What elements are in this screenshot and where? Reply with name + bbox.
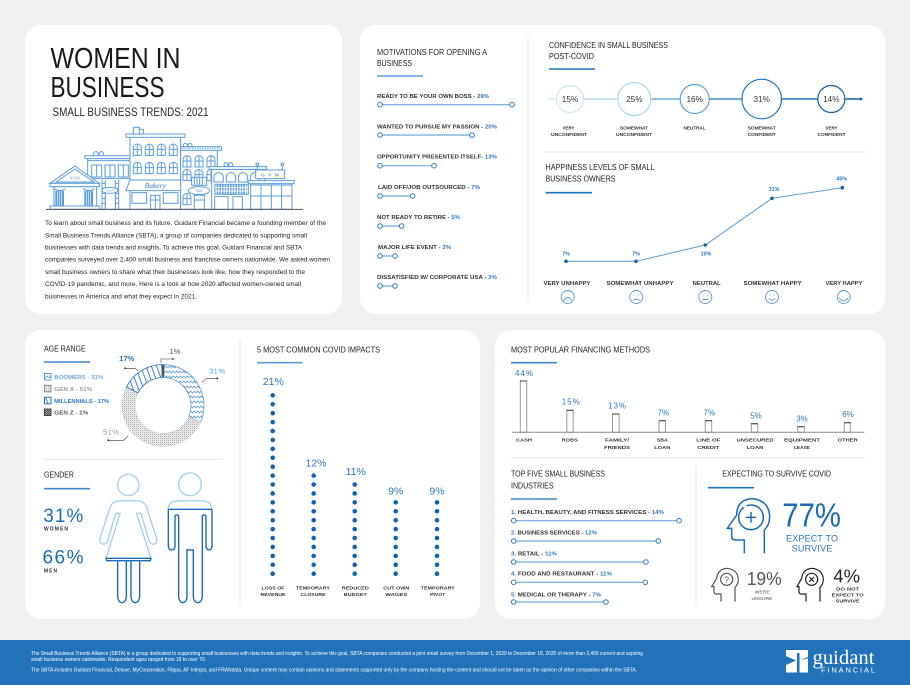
intro paragraph: [45, 220, 330, 300]
stat: do not expect to survive: [832, 567, 864, 605]
bars: industries: 5. MEDICAL OR THERAPY - 7%: [511, 592, 601, 598]
bars: motivations: MAJOR LIFE EVENT - 3%: [378, 245, 451, 251]
heading: confidence: POST-COVID: [549, 51, 594, 61]
chart: financing bars: EQUIPMENT: [784, 438, 820, 444]
building: b and b: [181, 143, 221, 209]
title: WOMEN IN: [50, 43, 180, 75]
chart: financing bars: 44%: [515, 369, 533, 378]
intro paragraph: COVID-19 pandemic, and more. Here is a look at how 2020 affected women-owned small: [45, 281, 301, 288]
chart: financing bars: SBA: [657, 438, 668, 444]
heading: happiness: BUSINESS OWNERS: [546, 174, 616, 184]
chart: covid impact dot columns: PIVOT: [430, 592, 445, 598]
icon: woman figure: [100, 474, 157, 603]
heading: industries: INDUSTRIES: [511, 480, 554, 490]
heading: motivations: MOTIVATIONS FOR OPENING A: [377, 47, 487, 57]
building: apartment with bakery: Bakery: [145, 182, 167, 190]
heading: confidence: CONFIDENCE IN SMALL BUSINESS: [549, 40, 668, 50]
logo: guidant financial: guidant: [812, 647, 875, 669]
chart: confidence timeline: [548, 79, 862, 138]
bars: motivations: WANTED TO PURSUE MY PASSION - 20%: [377, 124, 497, 130]
bars: motivations: OPPORTUNITY PRESENTED ITSELF- 13%: [377, 154, 497, 160]
icon: head with question mark: [712, 568, 738, 602]
chart: financing bars: 7%: [704, 409, 715, 418]
chart: happiness line: [544, 176, 863, 287]
chart: financing bars: ROBS: [562, 438, 579, 444]
chart: covid impact dot columns: CLOSURE: [300, 592, 326, 598]
intro paragraph: small business owners to share what their businesses look like, how they responded to the: [45, 269, 305, 276]
footer notes: The Small Business Trends Alliance (SBTA) is a group dedicated to supporting small businesses with data trends and insights. To achieve this goal, SBTA companies conducted a joint email survey from December 1, 2020 to December 18, 2020 of more than 2,400 current and aspiring: [31, 651, 643, 657]
bars: industries: [511, 510, 681, 604]
chart: financing bars: FRIENDS: [604, 445, 631, 451]
chart: financing bars: CASH: [516, 438, 533, 444]
chart: financing bars: LINE OF: [696, 438, 720, 444]
icon: head with plus: [727, 499, 770, 553]
chart: happiness line: VERY UNHAPPY: [544, 281, 591, 287]
chart: financing bars: 13%: [608, 401, 626, 410]
chart: happiness line: 31%: [769, 187, 780, 193]
chart: financing bars: CREDIT: [697, 445, 719, 451]
chart: age donut: 1%: [170, 347, 181, 356]
bars: industries: 3. RETAIL - 11%: [511, 552, 557, 558]
heading: industries: [511, 469, 605, 490]
heading: age range: AGE RANGE: [44, 343, 86, 353]
icon: man figure: [168, 473, 212, 603]
building: gym: [248, 163, 294, 209]
footer notes: [31, 651, 643, 674]
chart: covid impact dot columns: TEMPORARY: [296, 585, 331, 591]
subtitle: SMALL BUSINESS TRENDS: 2021: [52, 105, 209, 119]
heading: motivations: [377, 47, 487, 68]
stat: do not expect to survive: EXPECT TO: [832, 593, 864, 599]
icon: head with question mark: ?: [724, 574, 729, 584]
chart: confidence timeline: SOMEWHAT: [620, 126, 648, 132]
panel: demographics and covid impacts: [25, 330, 480, 619]
intro paragraph: Small Business Trends Alliance (SBTA), a group of companies dedicated to supporting small: [45, 232, 307, 240]
stat: expect to survive: EXPECT TO: [786, 534, 838, 544]
chart: happiness line: NEUTRAL: [693, 281, 721, 287]
legend: age range: GEN X - 51%: [54, 387, 93, 393]
stat: women: WOMEN: [44, 527, 68, 533]
stat: unsure: 19%: [747, 569, 782, 589]
bars: industries: 4. FOOD AND RESTAURANT - 11%: [511, 572, 612, 578]
chart: confidence timeline: VERY: [826, 126, 838, 132]
chart: confidence timeline: VERY: [562, 126, 575, 132]
stat: do not expect to survive: 4%: [833, 567, 860, 587]
chart: confidence timeline: CONFIDENT: [748, 132, 776, 138]
icon: head with x: [797, 568, 823, 602]
heading: financing: MOST POPULAR FINANCING METHODS: [511, 344, 650, 354]
legend: age range: MILLENNIALS - 17%: [54, 399, 109, 405]
chart: confidence timeline: CONFIDENT: [818, 132, 846, 138]
chart: financing bars: LOAN: [654, 445, 671, 451]
chart: financing bars: 7%: [658, 409, 669, 418]
legend: age range: GEN Z - 1%: [54, 410, 89, 416]
bars: motivations: DISSATISFIED W/ CORPORATE USA - 3%: [377, 275, 497, 281]
panel: intro: [25, 25, 342, 314]
chart: financing bars: 6%: [842, 410, 854, 419]
stat: expect to survive: SURVIVE: [792, 544, 832, 554]
stat: expect to survive: 77%: [782, 497, 841, 534]
intro paragraph: companies surveyed over 2,400 small business and franchise owners nationwide. We asked women: [45, 256, 330, 264]
chart: covid impact dot columns: TEMPORARY: [421, 585, 455, 591]
intro paragraph: businesses with data trends and insights. To achieve this goal, Guidant Financial and SBTA: [45, 244, 303, 252]
stat: women: 31%: [43, 506, 83, 527]
stat: unsure: [747, 569, 782, 602]
building: arched storefront: [209, 163, 267, 209]
chart: financing bars: FAMILY/: [605, 438, 630, 444]
stat: do not expect to survive: DO NOT: [836, 587, 859, 593]
intro paragraph: To learn about small business and its future, Guidant Financial became a founding member of the: [45, 220, 327, 227]
building: bank: BANK: [70, 176, 81, 180]
chart: confidence timeline: 31%: [754, 95, 770, 104]
panel: motivations and confidence: [360, 25, 885, 314]
chart: covid impact dot columns: 9%: [429, 486, 445, 498]
title: [50, 43, 180, 104]
bars: motivations: [377, 94, 514, 288]
building: apartment with bakery: [126, 127, 186, 209]
chart: confidence timeline: UNCONFIDENT: [551, 132, 587, 138]
chart: financing bars: OTHER: [838, 438, 858, 444]
bars: industries: 1. HEALTH, BEAUTY, AND FITNESS SERVICES - 14%: [511, 510, 664, 516]
stat: expect to survive: [782, 497, 841, 554]
chart: covid impact dot columns: 12%: [305, 458, 327, 470]
footer notes: small business owners nationwide. Respondent ages ranged from 18 to over 70.: [31, 657, 206, 663]
chart: financing bars: 15%: [562, 398, 580, 407]
intro paragraph: businesses in America and what they expect in 2021.: [45, 294, 197, 300]
chart: covid impact dot columns: LOSS OF: [262, 585, 285, 591]
bars: motivations: READY TO BE YOUR OWN BOSS - 29%: [377, 94, 489, 100]
chart: covid impact dot columns: REDUCED: [342, 585, 369, 591]
logo: guidant financial: [786, 647, 875, 674]
chart: age donut: 31%: [209, 366, 225, 375]
chart: age donut: [103, 347, 225, 447]
chart: covid impact dot columns: CUT OWN: [383, 585, 410, 591]
footer notes: The SBTA includes Guidant Financial, Deluxe, MyCorporation, Flippa, AF Integra, and FRANdata. Unique content may contain opinions and statements supported only by the company hosting the content and should not be taken as the opinion of other companies within the SBTA.: [31, 668, 637, 674]
heading: happiness: [546, 162, 655, 184]
chart: age donut: 51%: [103, 427, 119, 436]
bars: motivations: NOT READY TO RETIRE - 5%: [377, 215, 460, 221]
chart: confidence timeline: SOMEWHAT: [748, 126, 776, 132]
chart: financing bars: LOAN: [746, 445, 764, 451]
chart: happiness line: 7%: [632, 252, 640, 258]
chart: financing bars: UNSECURED: [736, 438, 774, 444]
heading: confidence: [549, 40, 668, 61]
stat: men: MEN: [44, 568, 57, 574]
building: b and b: S&B: [195, 189, 203, 193]
chart: covid impact dot columns: REVENUE: [260, 592, 286, 598]
logo: guidant financial: FINANCIAL: [821, 666, 875, 674]
stat: men: 66%: [42, 547, 84, 568]
bars: motivations: LAID OFF/JOB OUTSOURCED - 7%: [378, 185, 480, 191]
chart: financing bars: 5%: [750, 411, 762, 420]
chart: happiness line: 10%: [701, 252, 712, 258]
chart: financing bars: 3%: [796, 415, 808, 424]
title: BUSINESS: [50, 72, 164, 104]
chart: happiness line: 45%: [836, 176, 847, 182]
heading: motivations: BUSINESS: [377, 58, 412, 68]
chart: confidence timeline: 15%: [562, 95, 578, 104]
legend: age range: [44, 374, 109, 416]
heading: covid impacts: 5 MOST COMMON COVID IMPACTS: [257, 344, 380, 354]
heading: industries: TOP FIVE SMALL BUSINESS: [511, 469, 605, 479]
illustration: main street buildings: [46, 127, 303, 209]
stat: do not expect to survive: SURVIVE: [836, 599, 861, 605]
chart: age donut: 17%: [119, 354, 135, 363]
chart: covid impact dot columns: 9%: [388, 486, 403, 498]
stat: unsure: WERE: [755, 589, 771, 595]
chart: financing bars: [512, 369, 864, 451]
chart: covid impact dot columns: 21%: [263, 376, 284, 388]
building: small shop behind the bank: [85, 152, 131, 209]
building: bank: [50, 166, 99, 209]
legend: age range: BOOMERS - 31%: [54, 375, 104, 381]
building: gym: GYM: [261, 172, 279, 178]
chart: confidence timeline: NEUTRAL: [684, 126, 706, 132]
bars: industries: 2. BUSINESS SERVICES - 12%: [511, 531, 597, 537]
chart: covid impact dot columns: BUDGET: [344, 592, 367, 598]
footer band: [0, 640, 910, 685]
chart: confidence timeline: 14%: [823, 95, 839, 104]
icons: happiness faces: [561, 290, 850, 304]
stat: unsure: UNSURE: [752, 596, 773, 602]
chart: covid impact dot columns: [260, 376, 455, 598]
heading: gender: GENDER: [44, 470, 74, 480]
heading: survive: EXPECTING TO SURVIVE COVID: [722, 469, 831, 479]
chart: financing bars: LEASE: [794, 445, 811, 451]
chart: happiness line: VERY HAPPY: [826, 281, 863, 287]
chart: confidence timeline: 16%: [687, 95, 703, 104]
chart: happiness line: 7%: [562, 252, 570, 258]
building: small shop behind the bank: SHOP: [106, 188, 114, 192]
chart: confidence timeline: UNCONFIDENT: [616, 132, 652, 138]
chart: happiness line: SOMEWHAT HAPPY: [744, 281, 802, 287]
heading: happiness: HAPPINESS LEVELS OF SMALL: [546, 162, 655, 172]
chart: covid impact dot columns: WAGES: [385, 592, 408, 598]
panel: financing, industries and survival: [495, 330, 885, 619]
chart: covid impact dot columns: 11%: [346, 466, 366, 478]
chart: confidence timeline: 25%: [626, 95, 642, 104]
chart: happiness line: SOMEWHAT UNHAPPY: [606, 281, 674, 287]
